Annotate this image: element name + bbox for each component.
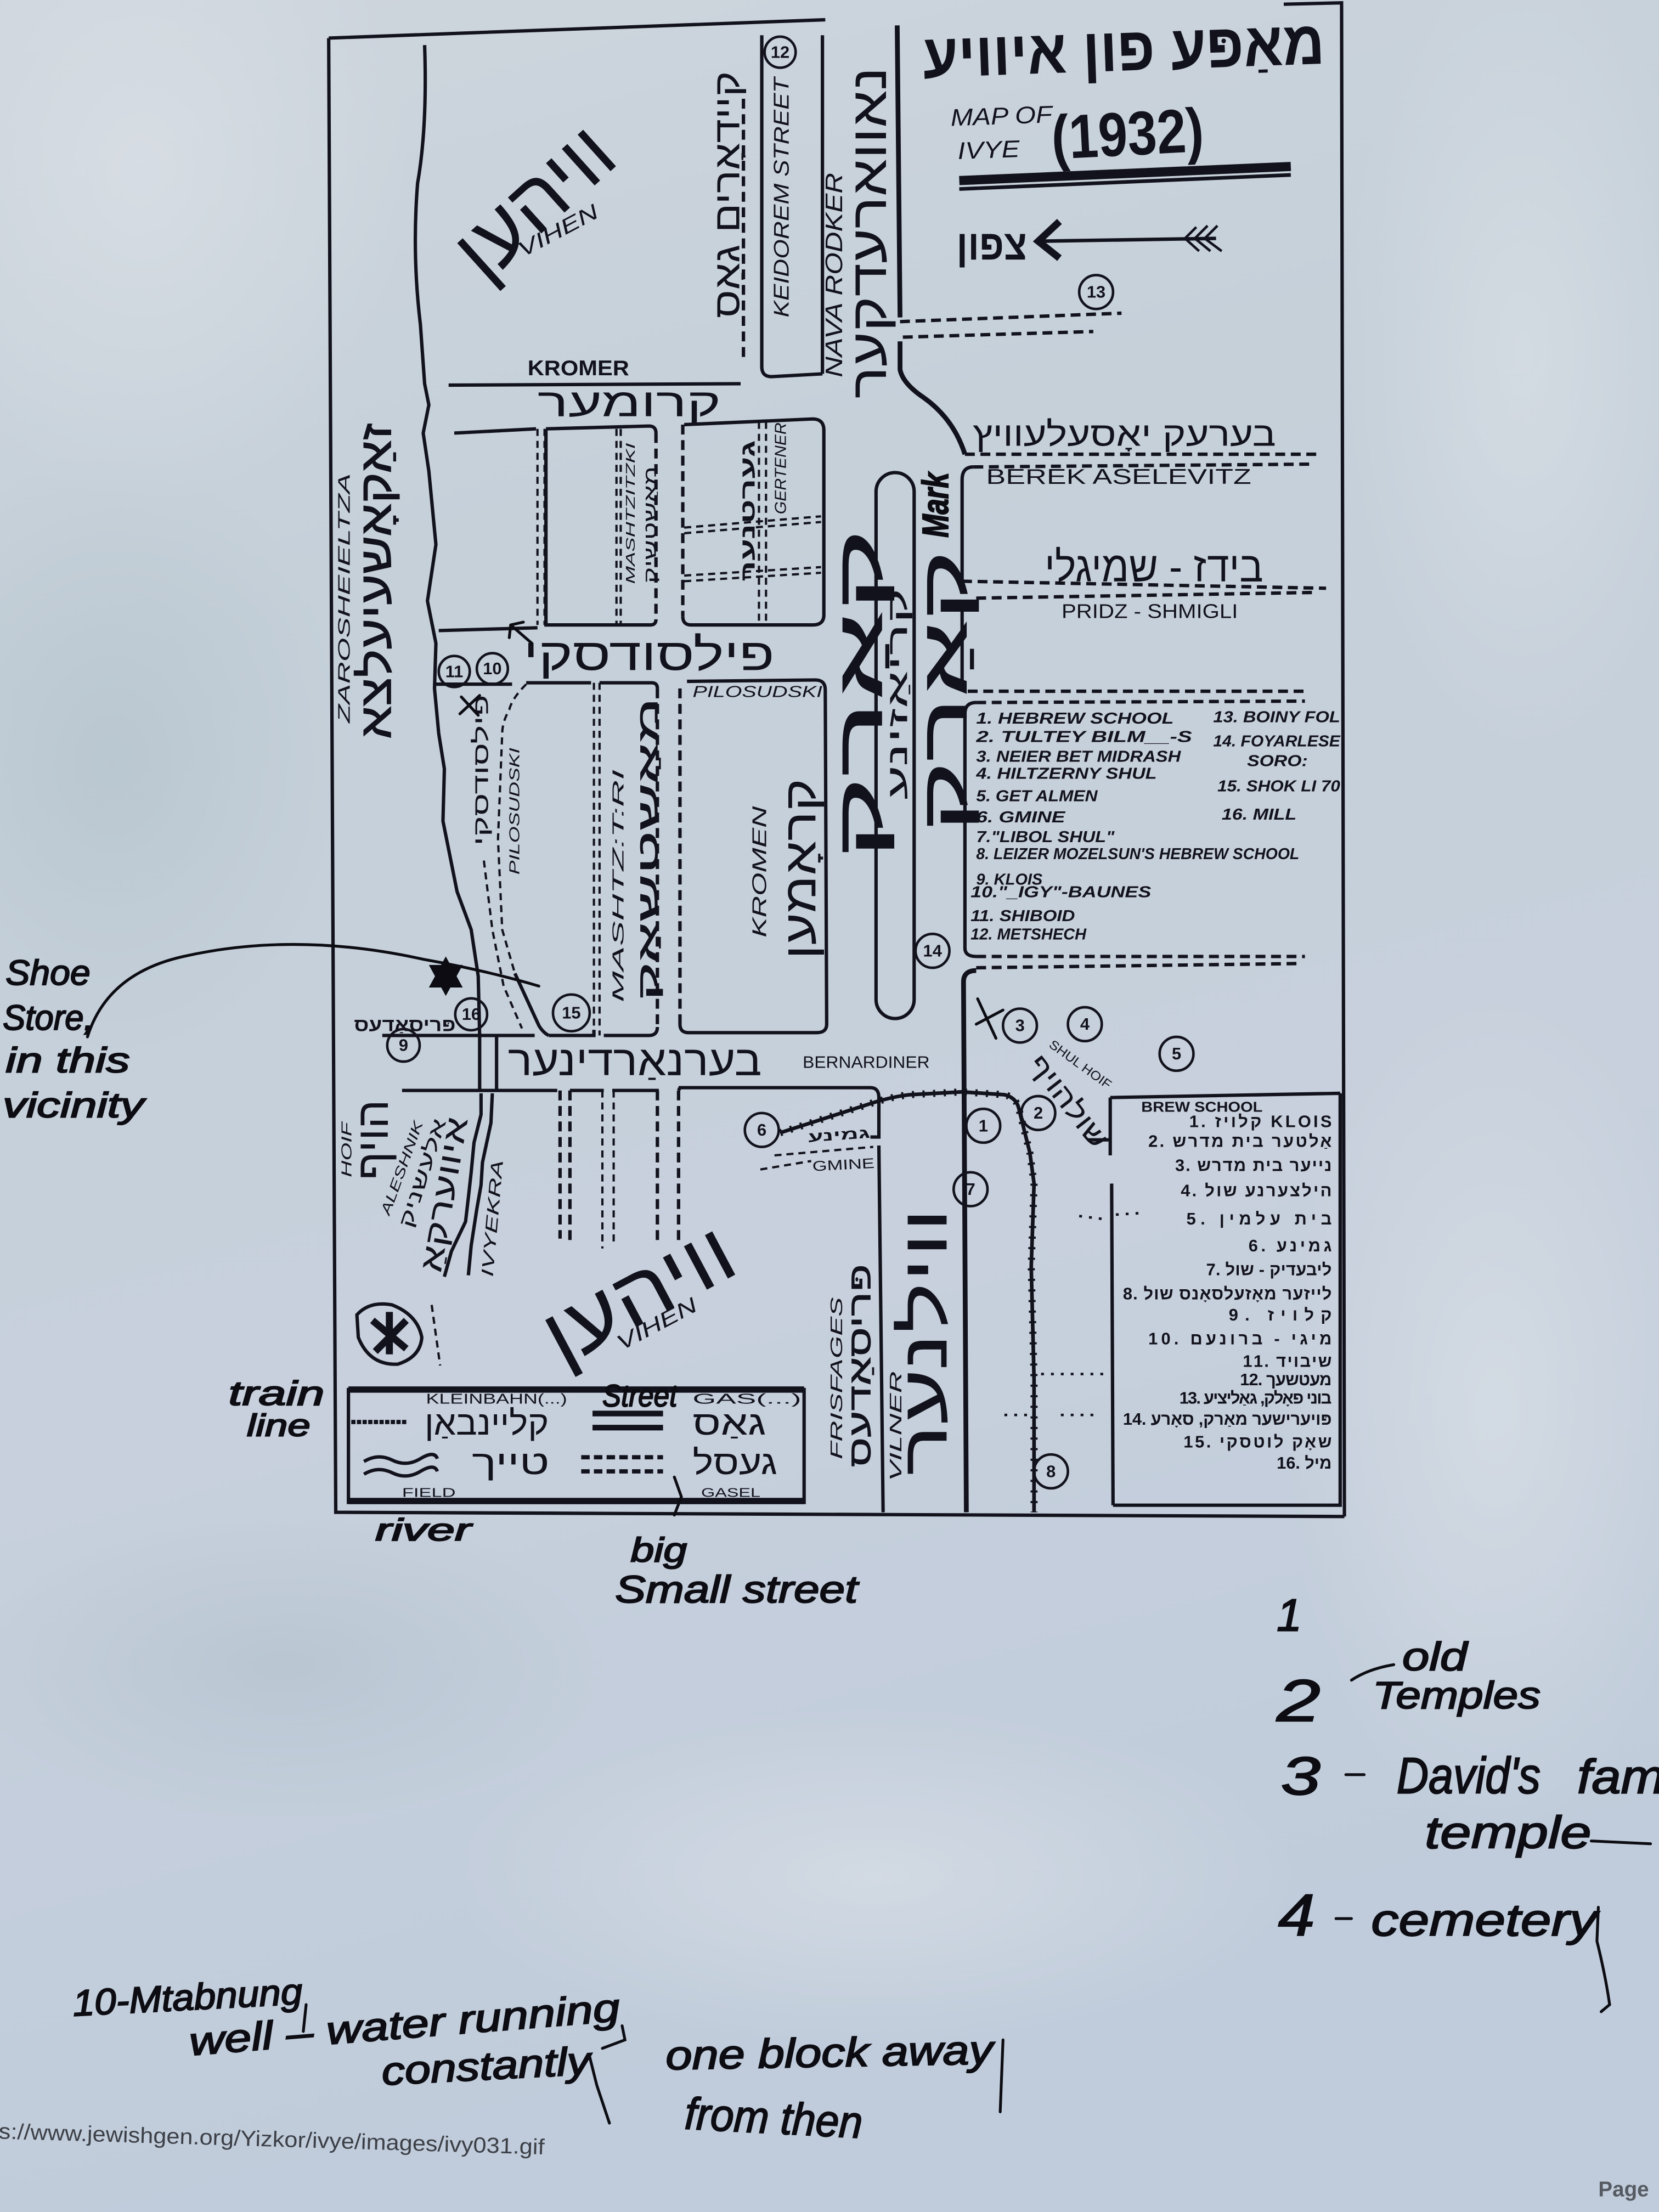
numbered legend: Yiddish: 6. גמינע xyxy=(1249,1236,1331,1255)
street name latin: Keidorem: KEIDOREM STREET xyxy=(770,76,793,318)
numbered legend: English: 3. NEIER BET MIDRASH xyxy=(976,748,1181,765)
numbered location markers: 4 xyxy=(1080,1014,1090,1034)
note: one block away from there xyxy=(665,2027,1003,2148)
street name latin: Nava Rodker: NAVA RODKER xyxy=(821,173,848,377)
numbered legend: Yiddish: 7. ליבעדיק - שול xyxy=(1206,1260,1331,1279)
numbered legend: English: 10."_IGY"-BAUNES xyxy=(970,883,1151,900)
numbered legend: Yiddish: 11. שיבויד xyxy=(1243,1352,1331,1371)
street name: Mashtzik lower: מאַשטשאַק xyxy=(631,698,663,1001)
label: train line: train xyxy=(229,1375,324,1413)
street name: Kromer: קרומער xyxy=(538,381,721,425)
year: (1932) xyxy=(1049,95,1205,172)
map key: קליינבאַן xyxy=(425,1404,549,1442)
street name latin: Kromer: KROMER xyxy=(528,357,629,380)
street name: Gertener: גערטנער xyxy=(737,440,759,581)
pointer from key to big small street xyxy=(674,1477,681,1515)
street name: Bernardiner: בערנאַרדינער xyxy=(508,1037,762,1084)
street name latin: Bernardiner: BERNARDINER xyxy=(803,1053,930,1072)
numbered legend: English xyxy=(970,708,1341,943)
street name latin upper: MASHTZITZKI xyxy=(623,442,637,584)
numbered legend: Yiddish: 15. שאָק לוטסקי xyxy=(1183,1432,1331,1451)
label latin: Aleshnik: ALESHNIK xyxy=(377,1118,427,1218)
note: well with running water xyxy=(72,1971,625,2123)
small label: Prisades: פּריסאַדעס xyxy=(354,1015,456,1036)
notes: numbered list right xyxy=(1276,1591,1659,2012)
numbered legend: English: 12. METSHECH xyxy=(970,926,1087,943)
street name latin on curve: PILOSUDSKI xyxy=(507,748,522,874)
numbered legend: English: 1. HEBREW SCHOOL xyxy=(976,709,1173,727)
note: well with running water: well – water running xyxy=(188,1986,622,2064)
numbered legend: Yiddish: 14. פּויערישער מאַרק, סאָרע xyxy=(1123,1409,1331,1429)
street name latin: Mashtzik: MASHTZ:T:RI xyxy=(610,769,627,1002)
numbered location markers: 1 xyxy=(979,1116,988,1135)
annotation: shoe store: vicinity xyxy=(3,1086,146,1125)
street name latin: Kromen: KROMEN xyxy=(748,805,770,938)
street name latin: Pridz Shmigli: PRIDZ - SHMIGLI xyxy=(1062,600,1238,622)
gmine label latin: GMINE xyxy=(812,1156,875,1175)
handwritten X marker near temple xyxy=(976,999,1003,1039)
market label right: קאַרק xyxy=(908,550,980,832)
annotation: shoe store: Shoe xyxy=(5,953,91,992)
street name latin: Berek Aselevitz: BEREK ASELEVITZ xyxy=(986,465,1251,489)
river label: Ivyerka: איווערקאַ xyxy=(413,1114,475,1274)
shul hoif label latin: SHUL HOIF xyxy=(1047,1037,1114,1092)
street name: Vilner: ווילנער xyxy=(888,1207,961,1476)
numbered location markers: 7 xyxy=(966,1180,975,1199)
numbered location markers: 3 xyxy=(1015,1016,1025,1035)
note: one block away from there: one block away xyxy=(665,2027,996,2078)
street name: Keidorim: קיידאָרים גאַס xyxy=(706,71,747,318)
numbered location markers: 11 xyxy=(445,662,463,681)
icon: star of David marker xyxy=(429,956,462,996)
numbered location markers: 13 xyxy=(1087,283,1105,302)
notes: numbered list right: 2 xyxy=(1276,1667,1321,1734)
numbered legend: English: 4. HILTZERNY SHUL xyxy=(975,764,1157,782)
annotation arrow: shoe store to map xyxy=(87,945,539,1037)
shul hoif label: שולהויף xyxy=(1022,1048,1115,1154)
numbered legend: Yiddish: BREW SCHOOL xyxy=(1141,1099,1262,1115)
label: big small street: Small street xyxy=(615,1568,860,1611)
street name: Prisades: פּריסאַדעס xyxy=(843,1264,877,1467)
street name: Kromen: קראָמען xyxy=(775,778,825,960)
notes: numbered list right: old xyxy=(1402,1635,1469,1679)
street name: Pilsudski: פילסודסקי xyxy=(523,630,775,680)
notes: numbered list right: David's xyxy=(1397,1747,1541,1804)
river xyxy=(415,45,492,1277)
scattered broken print marks xyxy=(1005,1213,1138,1415)
map outer frame xyxy=(329,3,1345,1516)
numbered legend: English: SORO: xyxy=(1247,752,1308,769)
numbered legend: Yiddish: 13. בוני פאָלק, גאַליציע xyxy=(1180,1389,1331,1408)
map key: געסל xyxy=(693,1444,777,1482)
numbered location markers: 8 xyxy=(1046,1462,1056,1481)
label: big small street: big xyxy=(630,1532,687,1570)
numbered legend: Yiddish: 8. לייזער מאָזעלסאָנס שול xyxy=(1123,1284,1331,1303)
numbered legend: Yiddish: 10. מיגי - ברונעם xyxy=(1148,1329,1331,1348)
numbered legend: Yiddish: 12. מעטשעך xyxy=(1240,1370,1331,1389)
label: Hoif: הויף xyxy=(348,1099,398,1180)
title block xyxy=(922,8,1325,189)
numbered legend: Yiddish xyxy=(1123,1099,1331,1472)
title double rule xyxy=(960,166,1291,180)
notes: numbered list right: 1 xyxy=(1277,1591,1302,1641)
street name on curve: פילסודסקי xyxy=(470,695,493,846)
title in Yiddish: מאַפּע פון איוויע xyxy=(922,8,1325,91)
numbered legend: English: 6. GMINE xyxy=(976,808,1066,826)
cemetery symbol xyxy=(357,1304,440,1365)
numbered legend: English: 9. KLOIS xyxy=(976,870,1042,888)
label: train line xyxy=(229,1375,324,1443)
numbered location markers: 9 xyxy=(399,1036,408,1055)
river label latin: Ivyerka: IVYEKRA xyxy=(478,1159,507,1278)
numbered location markers: 15 xyxy=(562,1003,581,1023)
north arrow xyxy=(956,222,1222,269)
numbered legend: Yiddish: 5. בית עלמין xyxy=(1187,1209,1331,1228)
handwritten annotations xyxy=(3,622,1659,2148)
market label left: קאַרק xyxy=(823,528,896,860)
English title label: MAP OF xyxy=(950,101,1054,132)
numbered legend: Yiddish: 16. מיל xyxy=(1277,1453,1331,1472)
street name: Navaredker: נאווארעדקער xyxy=(840,67,897,398)
annotation: shoe store: in this xyxy=(5,1040,130,1080)
area name latin: Vihen north: VIHEN xyxy=(514,200,602,262)
numbered legend: Yiddish: 3. נייער בית מדרש xyxy=(1175,1155,1331,1175)
numbered legend: English: 14. FOYARLESE xyxy=(1213,732,1341,749)
map key: GASEL xyxy=(701,1485,760,1499)
label: big small street xyxy=(615,1532,860,1611)
label: river: river xyxy=(375,1513,473,1547)
numbered legend: English: 16. MILL xyxy=(1222,805,1296,823)
numbered legend: English: 11. SHIBOID xyxy=(970,907,1075,924)
train line xyxy=(780,1092,1034,1513)
handwritten arrow at Pilsudski xyxy=(509,622,532,644)
annotation: shoe store xyxy=(3,953,146,1125)
map key: FIELD xyxy=(402,1485,456,1499)
source URL footer: s://www.jewishgen.org/Yizkor/ivye/images/ivy031.gif xyxy=(0,2119,545,2159)
annotation: shoe store: Store, xyxy=(3,998,93,1037)
area name: Vihen north: וויהען xyxy=(435,106,633,297)
notes: numbered list right: temple xyxy=(1425,1808,1592,1858)
gmine label small: גמינע xyxy=(808,1126,871,1146)
street name latin: Prisades: FRISFAGES xyxy=(827,1297,846,1459)
numbered location markers: 2 xyxy=(1034,1103,1043,1122)
numbered legend: Yiddish: 2. אַלטער בית מדרש xyxy=(1148,1132,1331,1151)
numbered location markers: 5 xyxy=(1172,1044,1181,1063)
label: north: צפון xyxy=(956,222,1027,269)
label latin: Hoif: HOIF xyxy=(339,1121,354,1177)
numbered legend: English: 8. LEIZER MOZELSUN'S HEBREW SCHOOL xyxy=(976,845,1299,862)
street name: Berek Yoselevitz: בערעק יאָסעלעוויץ xyxy=(973,416,1276,454)
street name latin: Pilsudski: PILOSUDSKI xyxy=(693,682,822,700)
numbered legend: English: 15. SHOK LI 70 xyxy=(1217,777,1340,795)
street name: Zakoshe: זאַקאָשעיעלצא xyxy=(351,423,400,739)
streets and block outlines xyxy=(382,25,1340,1513)
label: Aleshnik: אלעשניק xyxy=(394,1115,450,1230)
note: well with running water: 10-Mtabnung xyxy=(72,1971,303,2024)
handwritten: Mark: Mark xyxy=(915,471,956,538)
label: street: Street xyxy=(602,1379,678,1413)
map key: KLEINBAHN(...) xyxy=(426,1392,567,1407)
numbered location markers: 16 xyxy=(462,1005,481,1024)
notes: numbered list right: fam xyxy=(1577,1750,1659,1803)
notes: numbered list right: 4 xyxy=(1278,1882,1315,1948)
numbered location markers: 10 xyxy=(483,659,502,678)
numbered location markers: 6 xyxy=(757,1120,766,1139)
numbered legend: English: 7."LIBOL SHUL" xyxy=(976,828,1115,845)
label: train line: line xyxy=(247,1408,311,1443)
area name latin: Vihen south: VIHEN xyxy=(613,1293,701,1355)
street name latin: Gertener: GERTENER xyxy=(771,422,789,514)
numbered location markers: 12 xyxy=(771,42,789,61)
numbered legend: Yiddish: 1. קלויז KLOIS xyxy=(1189,1112,1331,1131)
numbered location markers: 14 xyxy=(923,941,942,960)
numbered legend: Yiddish: 4. הילצערנע שול xyxy=(1181,1181,1331,1200)
street name latin: Zarosh: ZAROSHEIELTZA xyxy=(335,473,354,724)
English title label 2: IVYE xyxy=(957,136,1020,165)
notes: numbered list right: cemetery xyxy=(1371,1895,1600,1945)
street name: Mashtzik upper: מאַשטשיק xyxy=(641,466,660,583)
note: one block away from there: from then xyxy=(684,2089,864,2148)
area name: Vihen south: וויהען xyxy=(527,1206,751,1383)
notes: numbered list right: Temples xyxy=(1373,1674,1541,1717)
map key: טייך xyxy=(472,1444,550,1482)
numbered legend: English: 13. BOINY FOL xyxy=(1213,708,1340,726)
map key xyxy=(348,1390,804,1503)
numbered location markers xyxy=(387,37,1193,1488)
page label: Page xyxy=(1598,2178,1649,2202)
numbered legend: English: 2. TULTEY BILM__-S xyxy=(975,728,1192,746)
market label centre: קריאַזינע xyxy=(881,588,913,800)
printed map xyxy=(329,3,1345,1516)
map key: GAS(...) xyxy=(693,1392,802,1407)
street name: Bridz Shmigli: בידז - שמיגלי xyxy=(1045,543,1263,590)
street name latin: Vilner: VILNER xyxy=(886,1371,905,1481)
numbered legend: English: 5. GET ALMEN xyxy=(976,787,1098,805)
handwritten X marker near well xyxy=(460,696,479,715)
note: well with running water: constantly xyxy=(381,2039,594,2094)
map key: גאַס xyxy=(693,1404,766,1442)
numbered legend: Yiddish: 9. קלויז xyxy=(1229,1305,1331,1324)
notes: numbered list right: 3 xyxy=(1281,1746,1321,1806)
